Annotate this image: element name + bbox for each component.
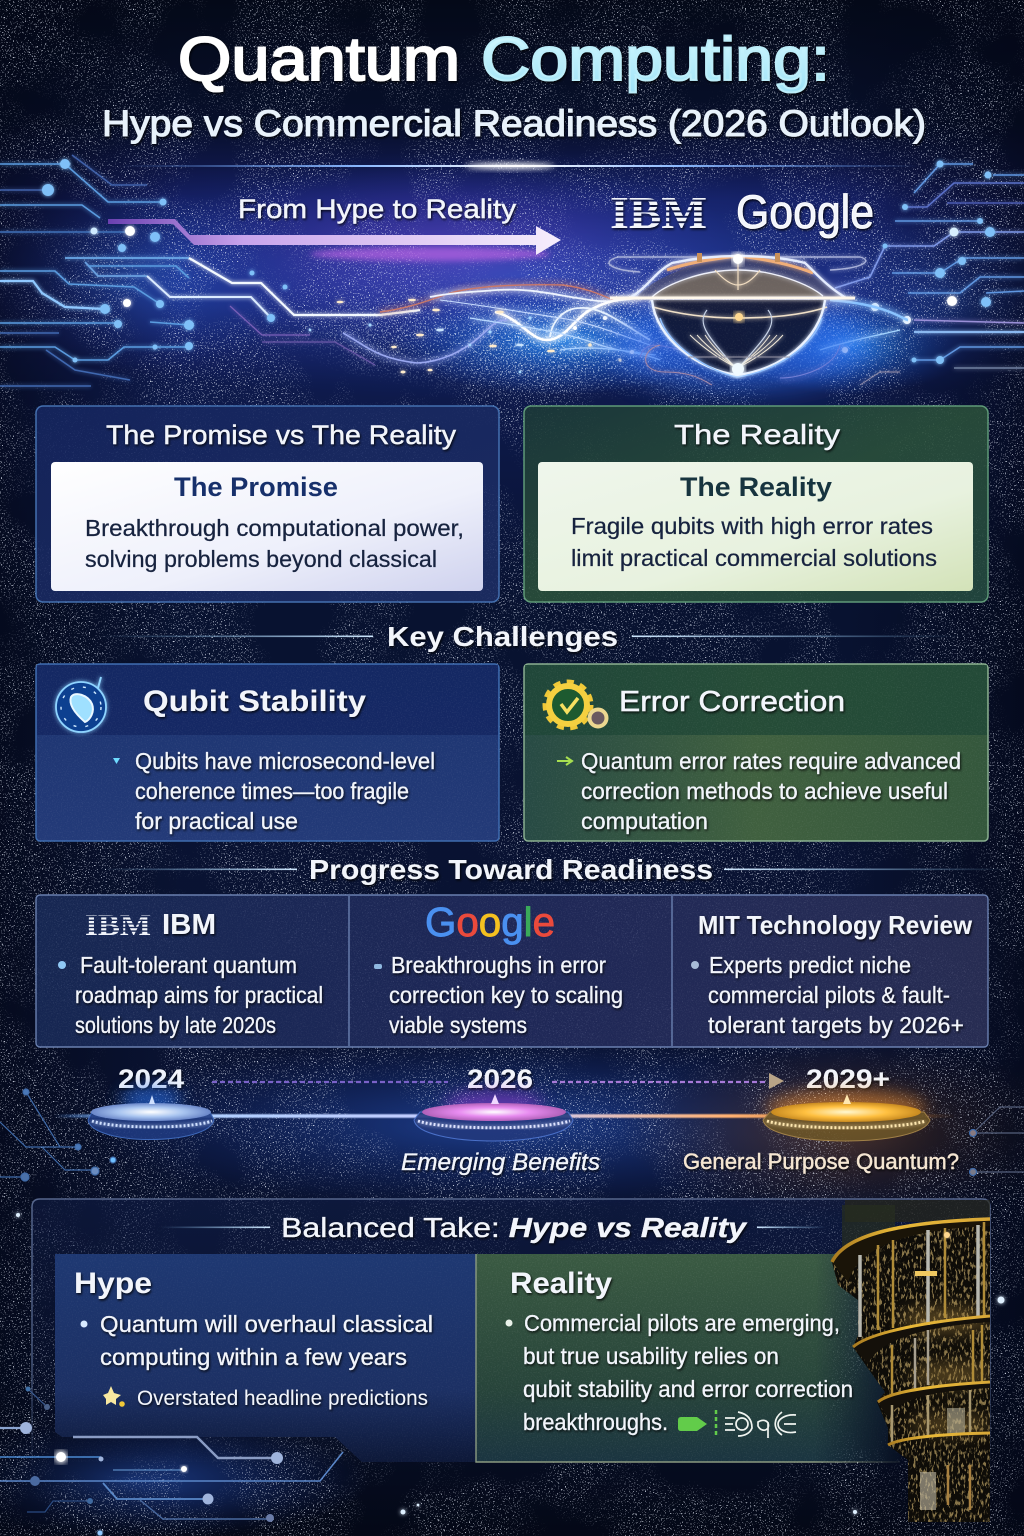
title: Quantum — [178, 25, 460, 93]
milestone disc 2024 — [88, 1086, 214, 1140]
panel: progress toward readiness — [36, 895, 988, 1047]
quantum chip — [609, 253, 870, 390]
panel: the reality — [524, 406, 988, 602]
card: reality: qubit stability and error correction — [523, 1376, 853, 1402]
arrow marker — [557, 757, 572, 765]
panel: error correction — [524, 664, 988, 841]
panel: qubit stability — [36, 664, 499, 841]
logo: IBM: IBM — [610, 187, 707, 238]
card: hype — [55, 1254, 476, 1462]
promise card: The Promise — [174, 472, 338, 502]
balanced take heading: Balanced Take: Hype vs Reality — [281, 1212, 748, 1243]
column: IBM: IBM — [162, 909, 216, 941]
column: IBM: IBM — [85, 909, 151, 942]
sparkles — [16, 1213, 1004, 1514]
left circuit traces — [0, 155, 420, 386]
right circuit traces — [835, 164, 1024, 385]
panel: balanced take — [0, 1199, 1004, 1536]
column: Google: Google — [425, 899, 555, 945]
logo: Google: Google — [736, 185, 874, 238]
left circuit nodes — [42, 159, 288, 362]
particle field — [309, 299, 848, 374]
column: Google: Breakthroughs in error — [391, 952, 606, 978]
promise card — [51, 462, 483, 591]
column: IBM: roadmap aims for practical — [75, 982, 323, 1008]
card: hype: Hype — [74, 1267, 152, 1300]
general purpose label: General Purpose Quantum? — [683, 1149, 959, 1174]
reality card: limit practical commercial solutions — [571, 545, 937, 571]
promise card: solving problems beyond classical — [85, 546, 437, 572]
column: IBM: Fault-tolerant quantum — [80, 952, 297, 978]
bottom-left circuit nodes — [20, 1386, 283, 1536]
qubit stability text: for practical use — [135, 808, 298, 834]
title — [178, 25, 830, 93]
card: reality: Commercial pilots are emerging, — [524, 1310, 840, 1336]
error correction text: correction methods to achieve useful — [581, 778, 948, 804]
column: MIT Technology Review: tolerant targets by 2026+ — [708, 1012, 964, 1038]
milestone disc 2029+ — [763, 1090, 930, 1141]
arrowhead — [769, 1073, 784, 1089]
error correction text — [581, 748, 961, 834]
qubit stability text — [135, 748, 435, 834]
year labels — [118, 1064, 890, 1094]
year labels: 2024 — [118, 1064, 184, 1094]
qubit stability text: coherence times—too fragile — [135, 778, 409, 804]
heading: key challenges: Key Challenges — [387, 621, 618, 652]
bottom-left circuit traces — [0, 1389, 343, 1519]
card: reality: breakthroughs. — [523, 1409, 668, 1435]
qubit stability heading: Qubit Stability — [143, 685, 366, 718]
card: reality — [476, 1254, 900, 1462]
column: Google: correction key to scaling — [389, 982, 623, 1008]
error correction text: computation — [581, 808, 708, 834]
column: MIT Technology Review: commercial pilots & fault- — [708, 982, 950, 1008]
heading: progress toward readiness: Progress Toward Readiness — [309, 854, 713, 885]
arrow: from hype to reality — [108, 219, 561, 261]
dashed connectors — [212, 1081, 768, 1083]
reality card: Fragile qubits with high error rates — [571, 513, 933, 539]
card: hype: computing within a few years — [100, 1344, 407, 1370]
hype to reality label: From Hype to Reality — [238, 194, 517, 224]
illustration: quantum tower — [825, 1200, 995, 1530]
card: hype: Quantum will overhaul classical — [100, 1311, 433, 1337]
subtitle: Hype vs Commercial Readiness (2026 Outlook) — [102, 103, 926, 144]
icon: qubit sphere — [56, 677, 106, 732]
card: reality: Reality — [510, 1267, 612, 1300]
icon: gears — [547, 684, 606, 726]
column: MIT Technology Review — [691, 910, 973, 1038]
title: Computing: — [481, 25, 830, 93]
year labels: 2029+ — [806, 1064, 890, 1094]
column: IBM — [58, 909, 323, 1038]
icon: green battery and glyph mark — [678, 1410, 796, 1438]
card: reality: but true usability relies on — [523, 1343, 779, 1369]
promise card: Breakthrough computational power, — [85, 515, 464, 541]
emerging benefits label: Emerging Benefits — [401, 1149, 600, 1176]
error correction text: Quantum error rates require advanced — [581, 748, 961, 774]
panel: the promise vs the reality — [36, 406, 499, 602]
column: MIT Technology Review: Experts predict niche — [709, 952, 911, 978]
column: MIT Technology Review: MIT Technology Review — [698, 910, 973, 940]
tower body — [832, 1220, 990, 1522]
quantum waves — [343, 285, 908, 378]
promise heading: The Promise vs The Reality — [106, 420, 457, 450]
reality card: The Reality — [680, 472, 832, 502]
milestone disc 2026 — [414, 1091, 573, 1141]
column: Google: viable systems — [389, 1012, 527, 1038]
right circuit nodes — [871, 160, 995, 364]
column: IBM: solutions by late 2020s — [75, 1012, 276, 1038]
qubit stability text: Qubits have microsecond-level — [135, 748, 435, 774]
card: hype: Overstated headline predictions — [137, 1387, 428, 1410]
side circuit traces: timeline band — [0, 1089, 1024, 1181]
reality card — [538, 462, 973, 591]
reality heading: The Reality — [674, 419, 840, 450]
year labels: 2026 — [467, 1064, 533, 1094]
error correction heading: Error Correction — [619, 686, 845, 718]
bullet marker — [113, 758, 120, 764]
timeline — [55, 1064, 959, 1176]
column: Google — [374, 899, 623, 1038]
tower golden rings — [832, 1219, 990, 1522]
icon: sparkle — [103, 1386, 125, 1407]
hero flare line — [120, 163, 920, 169]
